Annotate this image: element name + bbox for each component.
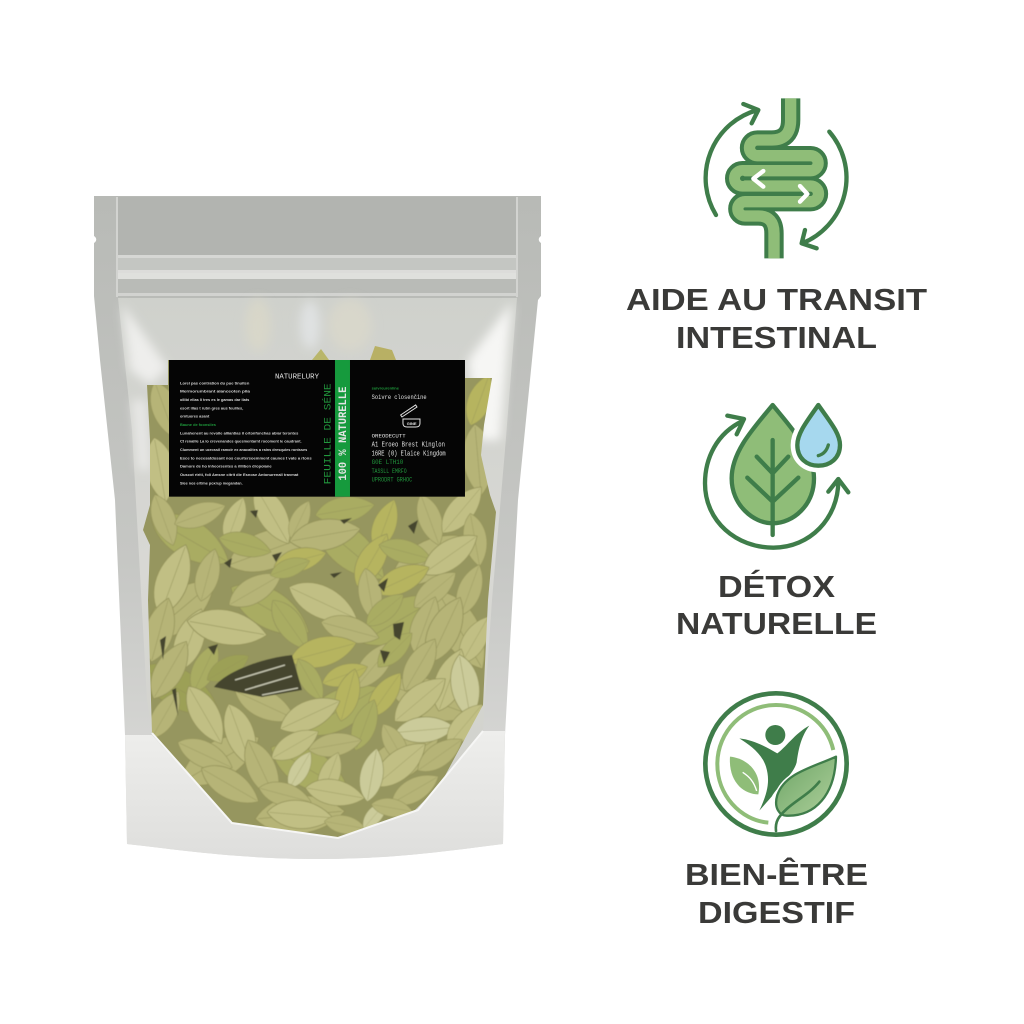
- product label: [169, 360, 465, 497]
- body: [739, 726, 809, 811]
- heading: digestive wellbeing: BIEN-ÊTRE: [685, 856, 868, 892]
- icon: person and leaves in circle: [705, 693, 847, 835]
- heading: transit: [626, 282, 927, 355]
- intestine tube fill: [735, 98, 818, 258]
- mini pot icon: GINE: [407, 421, 417, 426]
- gusset fold line: [152, 731, 483, 838]
- pouch body outline: [94, 196, 541, 859]
- left description text: esort illas t rutm gres aus feuilles,: [180, 406, 243, 410]
- brand name: NATURELURY: [275, 374, 320, 382]
- right column text: G0E LTH10: [372, 459, 404, 466]
- senna leaves: [132, 350, 500, 850]
- heading: digestive wellbeing: DIGESTIF: [698, 895, 855, 930]
- right column text: OREODECUTT: [372, 432, 406, 439]
- left description text: Ouscot rtriti, foli Amsne citrit die Esnose Antonurenall travmat: [180, 473, 299, 477]
- small leaf: [730, 757, 759, 794]
- left description text: orntuores asant: [180, 415, 210, 419]
- green band: [335, 360, 350, 497]
- circular arrow left: [706, 104, 758, 215]
- top seal band: [116, 197, 518, 298]
- big leaf: [776, 757, 836, 816]
- heading: detox: NATURELLE: [676, 606, 877, 641]
- left description text: ollibi ellas li tres es le gamas dar ilats: [180, 398, 249, 402]
- big leaf midrib and stem: [776, 782, 819, 831]
- right column text: Soivre closenčine: [372, 393, 427, 401]
- left description text: Damore de ho inheorsentes a rilliben dropoiane: [180, 465, 272, 469]
- circular arrow: [705, 416, 848, 548]
- right column text: [372, 386, 446, 484]
- drop highlight: [818, 445, 828, 456]
- icon: intestine with circular arrows: [706, 98, 846, 258]
- transit chevrons: [753, 171, 807, 202]
- drop halo: [797, 405, 840, 466]
- left description text: Lorel pas contration du pue tinuiten: [180, 382, 250, 386]
- vertical product name: FEUILLE DE SÉNE: [320, 383, 334, 484]
- heading: digestive wellbeing: [685, 856, 868, 930]
- icon: leaf and water drop: [705, 405, 848, 548]
- frosted window: [118, 298, 517, 838]
- left description text: Clumment un ucrossil ramoir ex anacalites a rains dresquies rontsses: [180, 448, 307, 452]
- window fold highlights: [122, 299, 512, 470]
- dark gaps in leaves: [160, 510, 418, 716]
- heading: transit: INTESTINAL: [676, 320, 877, 355]
- left description text: Lunahenent au revoile alliantias il ortonfonchas abiar terontes: [180, 431, 298, 435]
- small leaf vein: [743, 772, 757, 791]
- leaf tips above label: [312, 346, 396, 360]
- right column text: TASSLL EMRFO: [372, 468, 407, 475]
- right column text: UPRODRT GRHOC: [372, 477, 413, 484]
- water drop: [797, 405, 840, 466]
- outer ring: [705, 693, 847, 835]
- heading: transit: AIDE AU TRANSIT: [626, 282, 927, 317]
- leaf: [732, 405, 814, 523]
- mini pot icon: [401, 405, 420, 427]
- product pouch: [94, 196, 541, 859]
- left description text: Esce to necesatdosant nos courtersoemment caunes t vate a rtons: [180, 456, 312, 460]
- right column text: suivreurenline: [372, 386, 399, 390]
- big leaf halo: [776, 757, 836, 816]
- left description text: [180, 382, 312, 485]
- right column text: 16RE (0) Elaice Kingdom: [372, 451, 446, 459]
- right column text: A1 Eroeo Brest Kinglon: [372, 442, 445, 450]
- inner arc: [717, 705, 833, 823]
- circular arrow right: [802, 132, 846, 248]
- left description text: Baune de foonsiles: [180, 423, 216, 427]
- intestine dot: [740, 176, 745, 181]
- heading: detox: DÉTOX: [718, 569, 835, 604]
- left description text: Slee nos ertime poxrup megandan.: [180, 481, 243, 485]
- heading: detox: [676, 569, 877, 641]
- vertical claim: 100 % NATURELLE: [338, 387, 350, 481]
- leaf veins: [747, 440, 798, 535]
- left description text: Mermorumbrant alanceoten pila: [180, 390, 251, 394]
- bottom gusset: [125, 731, 505, 859]
- intestine tube outline: [735, 98, 818, 258]
- head: [765, 725, 785, 745]
- left description text: Ct renaille La lo crevenandes quesmentarnt rocoment le caudrant.: [180, 440, 302, 444]
- pale stems in dark gap: [235, 665, 298, 695]
